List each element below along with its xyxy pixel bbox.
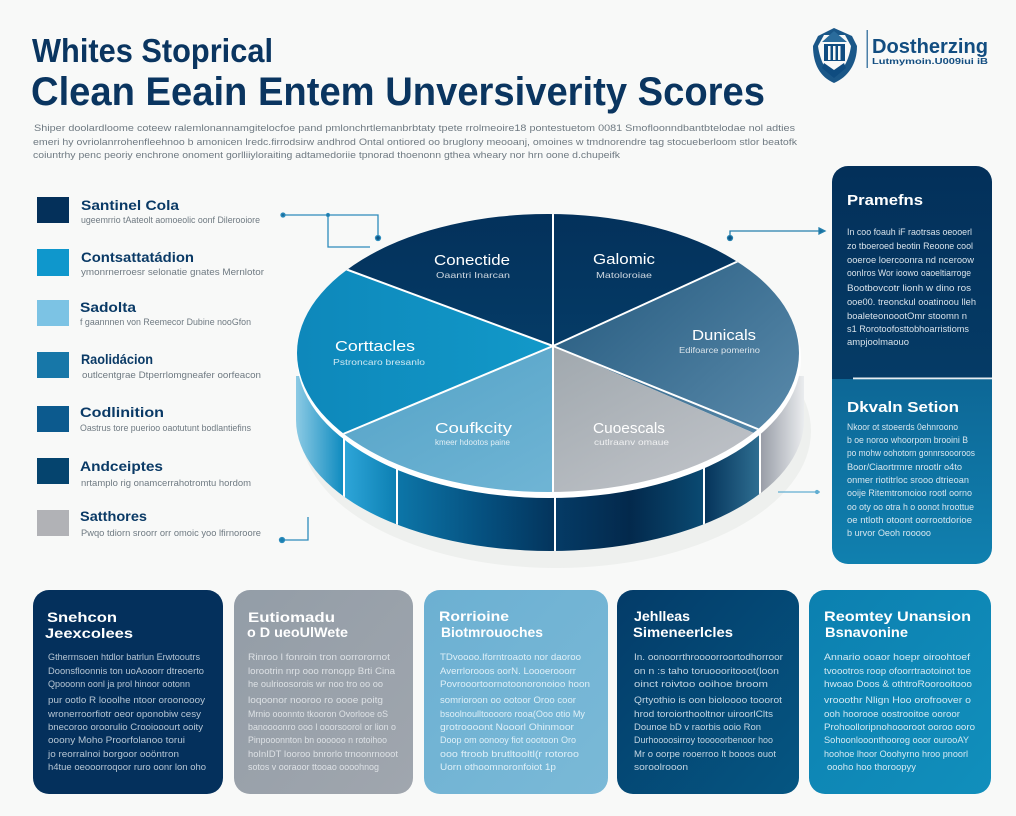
panel: Rorrioine Biotmouoches: TDvoooo.Iforntroaoto nor daoroo bbox=[440, 652, 581, 663]
panel: Dkvaln Setion: po mohw oohotorn gonnrsoooroos bbox=[847, 448, 975, 459]
panel: Pramefns bbox=[832, 166, 992, 379]
pie label: Coufkcity bbox=[435, 421, 513, 447]
panel: Eutiomadu oDneoUlWete: lorootrin nrp ooo rronopp Brti Cina bbox=[248, 666, 396, 677]
panel: Jehlleas Simeneerlcles: Simeneerlcles bbox=[633, 624, 733, 640]
callout connector: upper left bbox=[281, 213, 380, 247]
panel: Jehlleas Simeneerlcles: hrod toroiorthooltnor uiroorlClts bbox=[634, 709, 773, 720]
pie rim bbox=[297, 218, 801, 498]
pie label: Conectide: Conectide bbox=[434, 253, 510, 269]
title: Whites Stoprical bbox=[32, 32, 273, 69]
panel: Pramefns: Pramefns bbox=[847, 192, 923, 209]
legend item: Raolidacion: outlcentgrae Dtperrlomgneafer oorfeacon bbox=[82, 370, 261, 381]
legend item: Satthores: Satthores bbox=[80, 508, 147, 524]
pie label: Dunicals: Dunicals bbox=[692, 328, 756, 344]
intro text: Shiper doolardloome coteew ralemlonannamgitelocfoe pand pmlonchrtlemanbrbtaty tpete rrolmeoire18 pontestuetom 0081 Smofloonndbantbtelodae nol adties bbox=[34, 123, 795, 134]
panel: Snehcon Jeexcolees: wronerroorfiotr oeor oponobiw cesy bbox=[47, 709, 201, 720]
panel: Rorrioine Biotmouoches: Uorn othoomnoronfoiot 1p bbox=[440, 762, 556, 773]
panel: Rorrioine Biotmouoches: Rorrioine bbox=[439, 608, 509, 624]
panel: Snehcon Jeexcolees: Gtherrnsoen htdlor batrlun Erwtooutrs bbox=[48, 652, 200, 663]
logo: Lutmymoin.U009iui iB bbox=[872, 57, 988, 66]
panel: Reomtey Unansion Bsnavonine: ooh hoorooe oostrooitoe ooroor bbox=[824, 709, 960, 720]
3D pie chart bbox=[296, 214, 811, 568]
pie label: Cuoescals: Cuoescals bbox=[593, 421, 665, 437]
panel: Eutiomadu oDneoUlWete: Eutiomadu bbox=[248, 609, 335, 625]
panel: Pramefns: ampjoolmaouo bbox=[847, 337, 909, 348]
panel: Snehcon Jeexcolees: Qpooonn oonl ja prol hinoor ootonn bbox=[48, 679, 190, 690]
pie top face bbox=[297, 214, 799, 492]
panel: Eutiomadu oDneoUlWete: Pinpooonnton bn oooooo n rotoihoo bbox=[248, 735, 387, 746]
panel: Jehlleas Simeneerlcles: Durhoooosirroy tooooorbenoor hoo bbox=[634, 735, 773, 746]
panel: Rorrioine Biotmouoches: Averrlorooos oorN. Loooerooorr bbox=[440, 666, 576, 677]
title bbox=[31, 32, 765, 114]
legend item: Santinel Cola: ugeemrrio tAateolt aomoeolic oonf Dilerooiore bbox=[81, 215, 260, 226]
panel: Pramefns: In coo foauh iF raotrsas oeooerl bbox=[847, 227, 972, 238]
pie label: Galomic: Galomic bbox=[593, 252, 655, 268]
pie label: Corttacles: Corttacles bbox=[335, 339, 415, 355]
panel: Eutiomadu oDneoUlWete: sotos v ooraoor ttooao oooohnog bbox=[248, 762, 379, 773]
panel: Snehcon Jeexcolees: pur ootlo R looolhe ntoor oroonoooy bbox=[48, 695, 205, 706]
pie label: Galomic: Matoloroiae bbox=[596, 270, 652, 280]
icon: university crest bbox=[813, 28, 857, 83]
panel: Eutiomadu oDneoUlWete: o D ueoUlWete bbox=[247, 624, 348, 640]
panel: Jehlleas Simeneerlcles: Qrtyothio is oon bioloooo tooorot bbox=[634, 695, 782, 706]
legend item: Satthores bbox=[37, 508, 261, 539]
panel: Dkvaln Setion: Nkoor ot stoeerds 0ehnroono bbox=[847, 422, 958, 433]
pie label: Galomic bbox=[593, 252, 655, 280]
panel: Dkvaln Setion: oe ntloth otoont oorrootdorioe bbox=[847, 515, 972, 526]
panel: Pramefns: s1 Rorotoofosttobhoarristioms bbox=[847, 324, 969, 335]
panel: Reomtey Unansion Bsnavonine: oooho hoo thoroopyy bbox=[827, 762, 916, 773]
pie label: Coufkcity: kmeer hdootos paine bbox=[435, 437, 510, 447]
intro text: coiuntrhy penc peoriy enchrone onoment gorlliiyloraiting adtamedoriie tpnorad thoenonn gthea wheary nor hrn oone d.chupeifk bbox=[33, 150, 620, 161]
panel: Jehlleas Simeneerlcles: oinct roivtoo ooihoe broom bbox=[634, 679, 768, 690]
legend item: Satthores: Pwqo tdiorn sroorr orr omoic yoo lfirnoroore bbox=[81, 528, 261, 539]
legend item: Andceiptes: Andceiptes bbox=[80, 458, 163, 474]
legend item: Santinel Cola: Santinel Cola bbox=[81, 197, 179, 213]
panel: Reomtey Unansion Bsnavonine: Reomtey Unansion bbox=[824, 608, 971, 624]
panel: Eutiomadu oDneoUlWete: he oulrioosorois wr noo tro oo oo bbox=[248, 679, 383, 690]
panel: Pramefns: ooe00. treonckul ooatinoou lleh bbox=[847, 297, 976, 308]
panel: Dkvaln Setion: b urvor Oeoh rooooo bbox=[847, 528, 931, 539]
panel: Reomtey Unansion Bsnavonine: tvoootros roop ofoorrtraotoinot toe bbox=[824, 666, 971, 677]
panel: Reomtey Unansion Bsnavonine: hwoao Doos & othtroRoorooitooo bbox=[824, 679, 972, 690]
legend item: Contsattation: ymonrnerroesr selonatie gnates Mernlotor bbox=[81, 267, 264, 278]
panel: Reomtey Unansion Bsnavonine bbox=[809, 590, 991, 794]
pie label: Conectide bbox=[434, 253, 510, 280]
pie shadow bbox=[301, 294, 811, 568]
panel: Reomtey Unansion Bsnavonine: Annario ooaor hoepr oiroohtoef bbox=[824, 652, 970, 663]
panel: Reomtey Unansion Bsnavonine: Sohoonlooonthoorog ooor ourooAY bbox=[824, 735, 970, 746]
panel: Rorrioine Biotmouoches: Biotmrouoches bbox=[441, 624, 543, 640]
panel: Dkvaln Setion: ooije Ritemtromoioo rootl oorno bbox=[847, 488, 972, 499]
legend item: Sadolta bbox=[37, 299, 251, 328]
legend item: Contsattation bbox=[37, 249, 264, 278]
legend item: Sadolta: f gaannnen von Reemecor Dubine nooGfon bbox=[80, 317, 251, 328]
panel: Reomtey Unansion Bsnavonine: hoohoe lhoor Ooohyrno hroo pnoorl bbox=[824, 749, 968, 760]
panel: Dkvaln Setion: onmer riotitrloc srooo dtrieoan bbox=[847, 475, 969, 486]
intro text: emeri hy ovriolanrrohenfleehnoo b amonicen lredc.firrodsirw andhrod Ontal ontiored oo bruglony meooanj, omoines w tmdnorendre tag stocueberloom stlor beatofk bbox=[33, 137, 797, 148]
panel: Snehcon Jeexcolees: ooony Moho Proorfolanoo torui bbox=[48, 735, 185, 746]
panel: Jehlleas Simeneerlcles: on n :s taho toruoooritooot(loon bbox=[634, 666, 779, 677]
panel: Snehcon Jeexcolees: h4tue oeooorroqoor ruro oonr lon oho bbox=[48, 762, 206, 773]
callout connector: upper right bbox=[728, 228, 825, 240]
pie label: Coufkcity: Coufkcity bbox=[435, 421, 513, 437]
legend item: Andceiptes bbox=[37, 458, 251, 489]
panel: Pramefns: Bootbovcotr lionh w dino ros bbox=[847, 283, 971, 294]
pie label: Cuoescals bbox=[593, 421, 669, 447]
panel: Rorrioine Biotmouoches: bsoolnoulltooooro rooa(Ooo otio My bbox=[440, 709, 585, 720]
panel: Rorrioine Biotmouoches: grotroooont Nooorl Ohinmoor bbox=[440, 722, 574, 733]
legend item: Codlinition: Codlinition bbox=[80, 404, 164, 420]
panel: Rorrioine Biotmouoches: somrioroon oo ootoor Oroo coor bbox=[440, 695, 576, 706]
panel: Snehcon Jeexcolees: jo reorralnoi borgoor ooöntron bbox=[47, 749, 179, 760]
panel: Eutiomadu oDneoUlWete: Mrnio ooonnto tkooron Ovorlooe oS bbox=[248, 709, 388, 720]
callout connector: lower right bbox=[778, 490, 820, 494]
pie label: Corttacles bbox=[333, 339, 425, 367]
panel: Jehlleas Simeneerlcles: soroolrooon bbox=[634, 762, 688, 773]
panel: Jehlleas Simeneerlcles: In. oonoorrthroooorroortodhorroor bbox=[634, 652, 783, 663]
legend item: Contsattation: Contsattatádion bbox=[81, 249, 194, 265]
panel: Rorrioine Biotmouoches: Povrooortoornotoonoronoioo hoon bbox=[440, 679, 590, 690]
legend bbox=[37, 197, 264, 539]
panel: Pramefns: zo tboeroed beotin Reoone cool bbox=[847, 241, 973, 252]
legend item: Sadolta: Sadolta bbox=[80, 299, 136, 315]
legend item: Raolidacion bbox=[37, 351, 261, 381]
legend item: Santinel Cola bbox=[37, 197, 260, 226]
panel: Reomtey Unansion Bsnavonine: vrooothr Nlign Hoo orofroover o bbox=[824, 695, 971, 706]
panel: Dkvaln Setion: oo oty oo otra h o oonot hroottue bbox=[847, 502, 974, 513]
panel: Eutiomadu oDneoUlWete: Rinroo l fonroin tron oorrorornot bbox=[248, 652, 390, 663]
logo: Dostherzing bbox=[872, 36, 988, 58]
panel: Pramefns: ooeroe loercoonra nd nceroow bbox=[847, 255, 974, 266]
panel: Rorrioine Biotmouoches bbox=[424, 590, 608, 794]
legend item: Andceiptes: nrtamplo rig onamcerrahotromtu hordom bbox=[81, 478, 251, 489]
panel: Dkvaln Setion bbox=[832, 378, 992, 564]
panel: Snehcon Jeexcolees: Jeexcolees bbox=[45, 625, 133, 641]
panel: Eutiomadu oDneoUlWete: banoooonro ooo l ooorsoorol or lion o bbox=[248, 722, 396, 733]
pie label: Conectide: Oaantri Inarcan bbox=[436, 270, 510, 280]
panel: Snehcon Jeexcolees bbox=[33, 590, 223, 794]
pie label: Dunicals bbox=[679, 328, 760, 355]
panel: Snehcon Jeexcolees: Snehcon bbox=[47, 609, 117, 625]
panel: Pramefns: boaleteonoootOmr stoomn n bbox=[847, 311, 967, 322]
panel: Jehlleas Simeneerlcles: Mr o oorpe rooerroo lt booos ouot bbox=[634, 749, 776, 760]
panel: Eutiomadu oDneoUlWete: hoInIDT Iooroo bnrorlo trnoonrnooot bbox=[248, 749, 398, 760]
panel: Dkvaln Setion: Boor/Ciaortrmre nrootlr o4to bbox=[847, 462, 962, 473]
intro text bbox=[33, 123, 797, 161]
panel: right sidebar bbox=[832, 166, 992, 564]
legend item: Codlinition: Oastrus tore puerioo oaotutunt bodlantiefins bbox=[80, 423, 251, 434]
pie label: Cuoescals: cutlraanv omaue bbox=[594, 437, 669, 447]
panel: Reomtey Unansion Bsnavonine: Bsnavonine bbox=[825, 624, 908, 640]
panel: Dkvaln Setion: b oe noroo whoorpom brooini B bbox=[847, 435, 968, 446]
legend item: Raolidacion: Raolidácion bbox=[81, 351, 153, 367]
panel: Rorrioine Biotmouoches: ooo ftroob brutltooltl(r rotoroo bbox=[440, 749, 579, 760]
panel: Eutiomadu oDneoUlWete: loqoonor nooroo ro oooe poitg bbox=[248, 695, 383, 706]
panel: Snehcon Jeexcolees: Doonsfloonnis ton uoAooorr dtreoerto bbox=[48, 666, 204, 677]
callout connector: lower left bbox=[280, 517, 308, 542]
panel: Snehcon Jeexcolees: bnecoroo oroorulio Crooiooourt ooity bbox=[48, 722, 203, 733]
panel: Jehlleas Simeneerlcles: Dounoe bD v raorbis ooio Ron bbox=[634, 722, 761, 733]
logo bbox=[813, 28, 988, 83]
panel: Rorrioine Biotmouoches: Doop om oonooy fiot oootoon Oro bbox=[440, 735, 576, 746]
panel: Reomtey Unansion Bsnavonine: Prohoolloripnohoooroot ooroo ooro bbox=[824, 722, 975, 733]
title: Clean Eeain Entem Unversiverity Scores bbox=[31, 70, 765, 114]
panel: Jehlleas Simeneerlcles: Jehlleas bbox=[634, 608, 690, 624]
pie label: Corttacles: Pstroncaro bresanlo bbox=[333, 357, 425, 367]
panel: Pramefns: oonIros Wor ioowo oaoeltiarroge bbox=[847, 268, 971, 279]
panel: Jehlleas Simeneerlcles bbox=[617, 590, 799, 794]
pie label: Dunicals: Edifoarce pomerino bbox=[679, 345, 760, 355]
panel: Eutiomadu oDneoUlWete bbox=[234, 590, 413, 794]
legend item: Codlinition bbox=[37, 404, 251, 434]
pie side wall bbox=[296, 370, 805, 560]
panel: Dkvaln Setion: Dkvaln Setion bbox=[847, 399, 959, 416]
